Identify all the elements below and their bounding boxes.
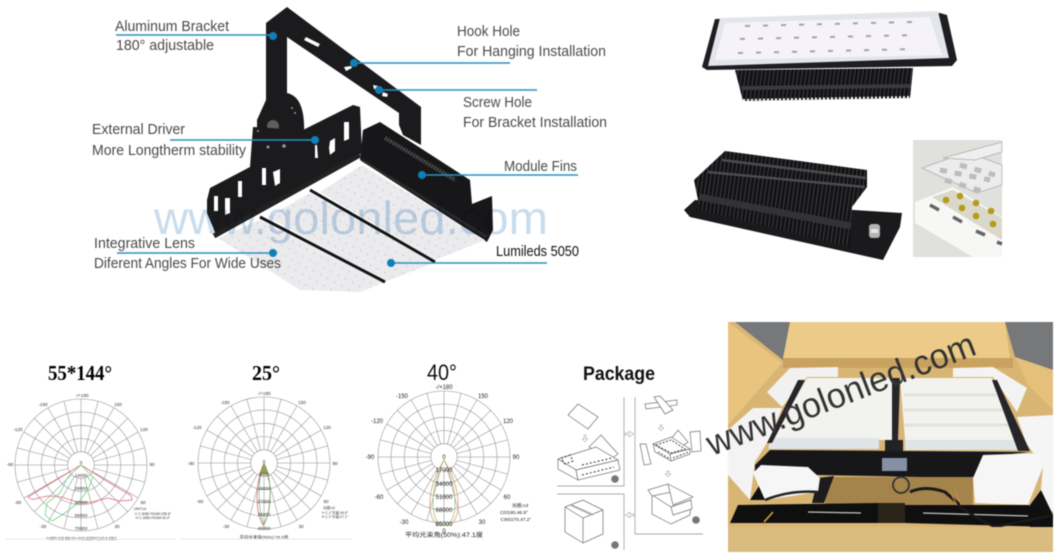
photo: lens close-up bbox=[913, 140, 1002, 257]
panel: polar chart 25: 36000 bbox=[258, 512, 271, 517]
callout: external driver bbox=[92, 121, 319, 159]
callout: aluminum bracket: Aluminum Bracket bbox=[115, 18, 230, 35]
arrows between steps bbox=[582, 425, 671, 518]
cardboard under crossbar bbox=[825, 477, 973, 505]
panel: polar chart 40: -30 bbox=[400, 520, 409, 526]
black crossbar bbox=[755, 450, 1030, 478]
panel: polar chart 25: 60 bbox=[323, 499, 329, 504]
panel: polar chart 25: -90 bbox=[188, 461, 195, 466]
panel: polar chart 25: 平均光束角(50%):26.6度 bbox=[240, 534, 289, 541]
panel: polar chart 25: -60 bbox=[197, 499, 204, 504]
panel: polar chart 55*144: 56000 bbox=[75, 513, 88, 518]
watermark fragment: ed.com bbox=[913, 217, 947, 229]
panel: polar chart 40: -60 bbox=[375, 495, 384, 501]
panel: polar chart 55*144: 90 bbox=[149, 462, 155, 467]
step 3 drawing bbox=[648, 484, 700, 524]
panel: lamp diagram bbox=[92, 7, 607, 292]
panel: polar chart 25: -150 bbox=[220, 400, 230, 405]
panel: polar chart 55*144: V C.3080 FEAM:155.6° bbox=[135, 512, 172, 516]
panel: polar chart 25 bbox=[6, 361, 352, 541]
divider lines under charts bbox=[6, 538, 352, 540]
panel: polar chart 40: C0/180,46.9° bbox=[500, 510, 528, 516]
panel: polar chart 55*144: 14000 bbox=[75, 473, 88, 478]
panel: polar chart 55*144: UNIT:cd bbox=[134, 507, 146, 511]
step 2 drawing bbox=[640, 396, 701, 465]
black supports bbox=[750, 483, 1053, 527]
panel: polar chart 25: 150 bbox=[298, 400, 306, 405]
panel: polar chart 55*144: 150 bbox=[114, 402, 122, 407]
panel: polar chart 40: C90/270,47.2° bbox=[501, 517, 531, 523]
panel: polar chart 25: 0 bbox=[263, 459, 266, 464]
photo: LED module heat sink bbox=[684, 151, 947, 260]
panel: polar chart 25: 90 bbox=[332, 461, 338, 466]
panel: polar chart 40: 平均光束角(50%):47.1度 bbox=[405, 531, 483, 539]
panel: polar chart 55*144 bbox=[7, 361, 172, 541]
panel: polar chart 25: -120 bbox=[192, 425, 202, 430]
watermark over lamp: www.golonled.com bbox=[153, 192, 548, 244]
heading: 25° bbox=[252, 361, 280, 385]
callout: aluminum bracket: 180° adjustable bbox=[116, 37, 214, 54]
photo: packed lamp in carton bbox=[700, 322, 1053, 552]
LED panels bbox=[320, 165, 485, 260]
heading: 55*144° bbox=[48, 361, 112, 385]
panel: polar chart 40: -90 bbox=[366, 455, 375, 461]
callout: hook hole: Hook Hole bbox=[457, 23, 520, 40]
panel: polar chart 55*144: AVERAGE BEAM ANGLE(50%):93.6 DEG bbox=[46, 536, 117, 541]
step badge 3 bbox=[692, 516, 700, 524]
panel: polar chart 40: 30 bbox=[479, 520, 486, 526]
callout: integrative lens bbox=[94, 235, 281, 272]
photo: LED module front bbox=[702, 11, 957, 101]
panel: polar chart 40 bbox=[366, 360, 531, 539]
callout: hook hole bbox=[350, 23, 606, 67]
callout: external driver: External Driver bbox=[92, 121, 185, 138]
panel: polar chart 25: 30 bbox=[298, 524, 304, 529]
panel: polar chart 55*144: 120 bbox=[140, 427, 148, 432]
panel: polar chart 40: -/+180 bbox=[435, 385, 453, 391]
callout: external driver: More Longtherm stability bbox=[92, 142, 246, 159]
panel: polar chart 25: 27000 bbox=[258, 499, 271, 504]
panel: polar chart 55*144: H C.3080 FEAM:33.4° bbox=[136, 516, 171, 520]
panel: polar chart 25: V C.1°平面:26.6° bbox=[322, 510, 349, 515]
panel: polar chart 40: -150 bbox=[396, 394, 409, 400]
callout: module fins: Module Fins bbox=[504, 158, 577, 175]
panel: polar chart 55*144: 30 bbox=[114, 524, 120, 529]
panel: polar chart 55*144: -30 bbox=[40, 524, 47, 529]
panel: polar chart 40: 51000 bbox=[436, 495, 453, 501]
step badge 4 bbox=[611, 541, 619, 549]
panel: polar chart 55*144: 0 bbox=[80, 460, 83, 465]
panel: polar chart 40: 60 bbox=[504, 495, 511, 501]
panel: polar chart 40: 0 bbox=[442, 529, 446, 535]
panel: polar chart 40: 34000 bbox=[436, 482, 453, 488]
foam blocks upper bbox=[767, 367, 838, 407]
wiring bbox=[765, 492, 818, 500]
panel: polar chart 55*144: -120 bbox=[13, 427, 23, 432]
panel: polar chart 40: 120 bbox=[503, 419, 514, 425]
panel: polar chart 40: 68000 bbox=[436, 508, 453, 514]
step badge 1 bbox=[611, 475, 619, 483]
callout: screw hole bbox=[375, 86, 607, 131]
panel: package steps bbox=[557, 364, 703, 550]
panel: polar chart 25: -30 bbox=[223, 524, 230, 529]
panel: polar chart 25: 120 bbox=[323, 425, 331, 430]
heading: 40° bbox=[427, 360, 457, 385]
lamp illustration bbox=[153, 7, 548, 292]
panel: polar chart 55*144: -150 bbox=[38, 402, 48, 407]
callout: hook hole: For Hanging Installation bbox=[457, 43, 606, 60]
bottom black brackets bbox=[730, 503, 878, 523]
callout: lumileds 5050: Lumileds 5050 bbox=[496, 243, 579, 260]
panel: polar chart 40: 85000 bbox=[436, 522, 453, 528]
panel: polar chart 55*144: 42000 bbox=[75, 500, 88, 505]
step 1 drawing bbox=[558, 404, 620, 483]
callout: aluminum bracket bbox=[115, 18, 277, 54]
panel: polar chart 40: 150 bbox=[478, 394, 489, 400]
panel: polar chart 40: -120 bbox=[371, 419, 384, 425]
panel: polar chart 55*144: 70000 bbox=[75, 526, 88, 531]
panel: polar chart 40: 0 bbox=[442, 455, 446, 461]
panel: polar chart 55*144: 28000 bbox=[75, 486, 88, 491]
lamp panels bbox=[772, 378, 892, 440]
panel: polar chart 55*144: 60 bbox=[140, 500, 146, 505]
watermark: www.golonled.com bbox=[700, 325, 981, 464]
panel: polar chart 40: 光圈:cd bbox=[512, 502, 528, 509]
panel: polar chart 40: 17000 bbox=[436, 468, 453, 474]
step 4 drawing bbox=[565, 500, 619, 549]
panel: polar chart 25: -/+180 bbox=[257, 391, 271, 396]
heading: Package bbox=[583, 364, 655, 385]
panel: polar chart 25: 45000 bbox=[258, 526, 271, 531]
callout: integrative lens: Integrative Lens bbox=[94, 235, 195, 252]
panel: polar chart 55*144: -/+180 bbox=[75, 393, 89, 398]
panel: polar chart 55*144: -60 bbox=[15, 500, 22, 505]
panel: polar chart 25: H C.1°平面:27.1° bbox=[322, 514, 349, 519]
foam blocks lower bbox=[753, 465, 820, 500]
panel: polar chart 55*144: -90 bbox=[7, 462, 14, 467]
callout: lumileds 5050 bbox=[387, 243, 579, 267]
panel: polar chart 25: 18000 bbox=[258, 486, 271, 491]
callout: module fins bbox=[418, 158, 578, 179]
panel: polar chart 25: 9000 bbox=[259, 472, 270, 477]
callout: screw hole: For Bracket Installation bbox=[463, 114, 607, 131]
callout: screw hole: Screw Hole bbox=[463, 94, 532, 111]
panel: polar chart 25: 光圈:cd bbox=[323, 505, 335, 510]
callout: integrative lens: Diferent Angles For Wide Uses bbox=[94, 255, 281, 272]
panel: polar chart 40: 90 bbox=[513, 455, 520, 461]
